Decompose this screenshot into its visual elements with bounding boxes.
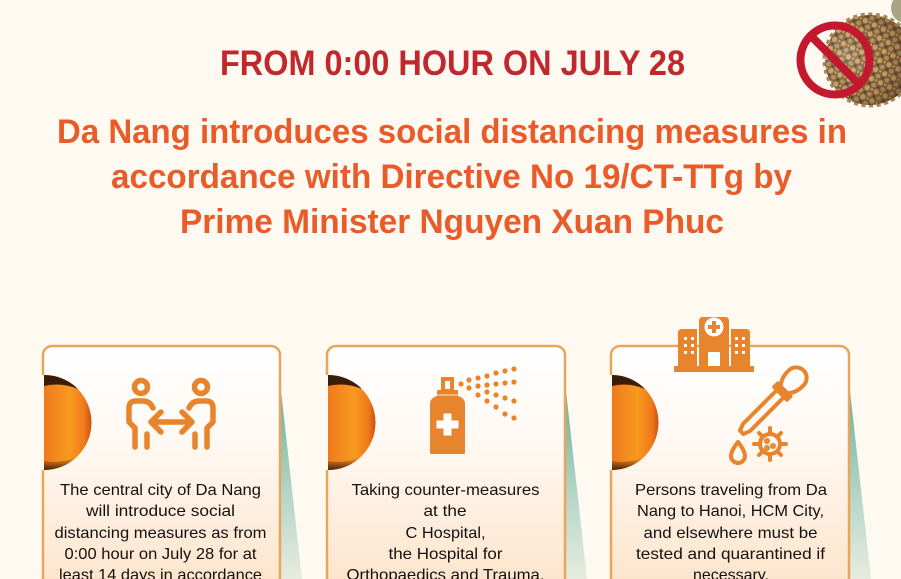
text block: Taking counter-measures xyxy=(352,482,540,499)
heading: Prime Minister Nguyen Xuan Phuc xyxy=(180,203,724,241)
heading: accordance with Directive No 19/CT-TTg by xyxy=(111,158,792,196)
title: FROM 0:00 HOUR ON JULY 28 xyxy=(220,44,685,83)
text block xyxy=(635,482,827,579)
half-circle tab xyxy=(328,375,376,470)
text block xyxy=(346,482,544,579)
panel: social distancing xyxy=(40,346,302,579)
text block: distancing measures as from xyxy=(54,525,266,542)
text block: the Hospital for xyxy=(388,546,503,563)
half-circle tab xyxy=(612,375,658,470)
icon: dropper and virus xyxy=(731,363,811,463)
text block xyxy=(54,482,266,579)
icon: hospital xyxy=(674,317,754,372)
panel: travellers tested xyxy=(608,317,871,579)
text block: Nang to Hanoi, HCM City, xyxy=(637,503,824,520)
text block: C Hospital, xyxy=(406,525,486,542)
text block: will introduce social xyxy=(85,503,235,520)
half-circle tab xyxy=(44,375,92,470)
text block: tested and quarantined if xyxy=(636,546,826,563)
text block: Persons traveling from Da xyxy=(635,482,827,499)
panel: counter-measures xyxy=(324,346,587,579)
icon: crossed-out virus xyxy=(800,0,901,105)
text block: The central city of Da Nang xyxy=(60,482,261,499)
icon: spray bottle xyxy=(430,366,517,454)
heading xyxy=(57,113,847,241)
text block: and elsewhere must be xyxy=(644,525,818,542)
heading: Da Nang introduces social distancing measures in xyxy=(57,113,847,151)
icon: two people with distance arrow xyxy=(129,380,213,447)
text block: 0:00 hour on July 28 for at xyxy=(64,546,257,563)
text block: at the xyxy=(424,503,467,520)
